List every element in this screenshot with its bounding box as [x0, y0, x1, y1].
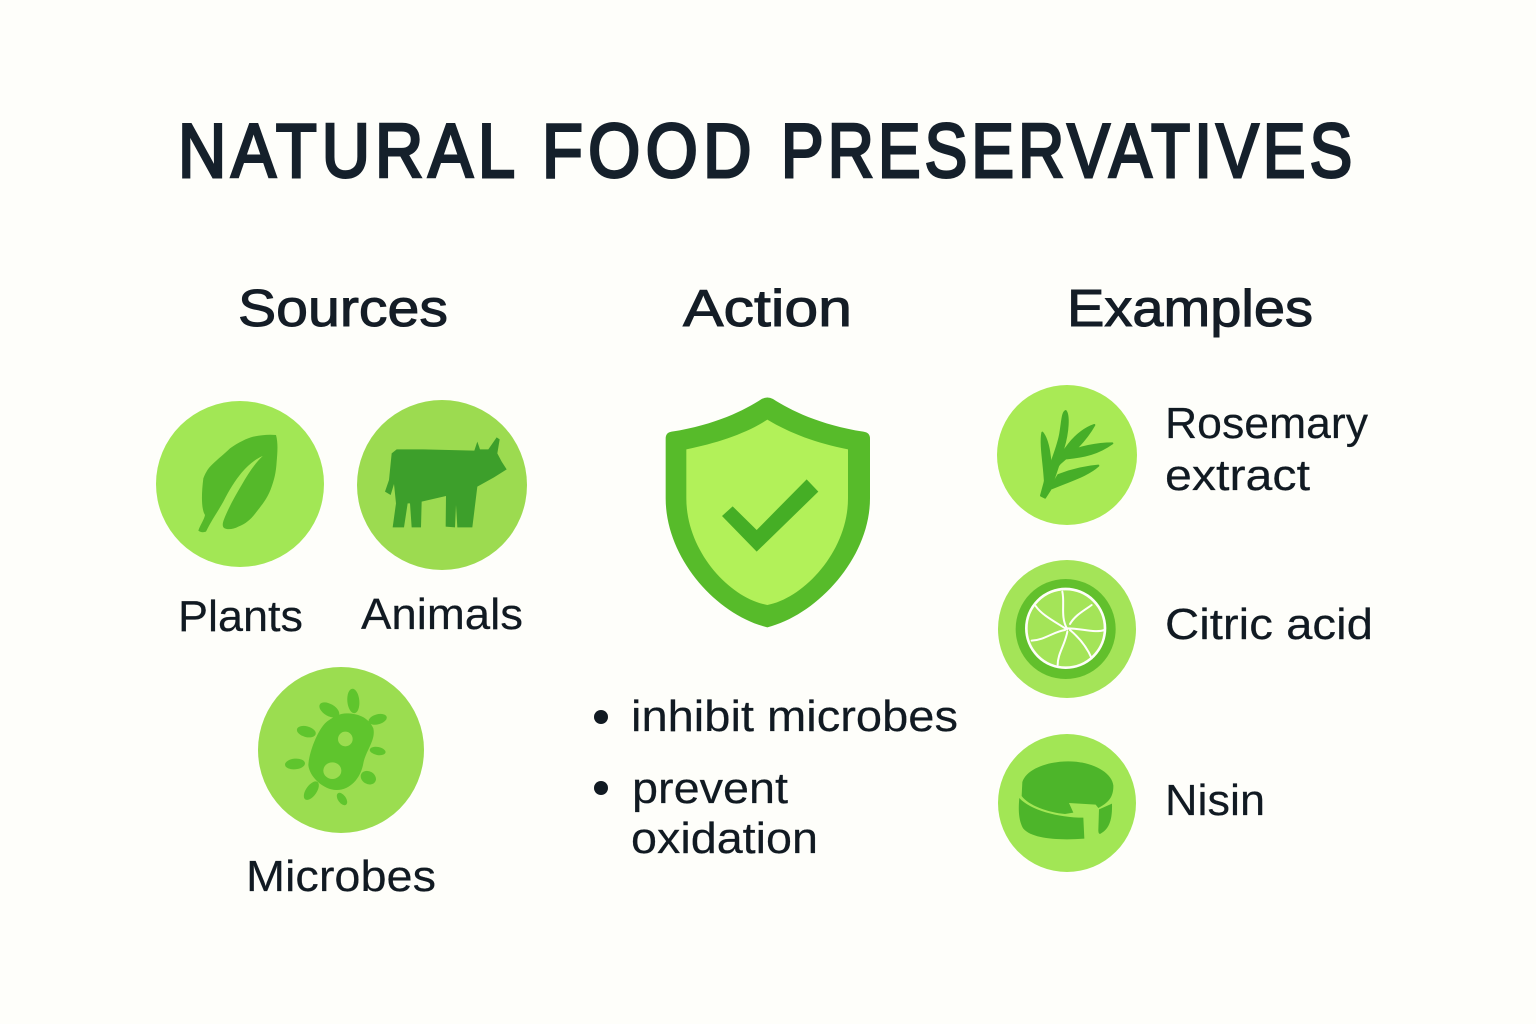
panel: sources	[156, 280, 527, 901]
icon: plants leaf	[156, 401, 324, 567]
icon: rosemary	[997, 385, 1137, 525]
heading: action: Action	[683, 280, 852, 338]
bullet: prevent oxidation: prevent	[632, 764, 788, 813]
bullet: inhibit microbes: inhibit microbes	[631, 692, 958, 741]
title	[178, 108, 1352, 194]
panel: examples	[997, 280, 1373, 872]
label: rosemary extract: extract	[1165, 451, 1310, 500]
icon: citrus slice	[998, 560, 1136, 698]
icon: shield with check	[666, 397, 870, 627]
label: nisin: Nisin	[1165, 776, 1265, 825]
icon: animals cow	[357, 400, 527, 570]
title: PRESERVATIVES	[781, 108, 1352, 193]
title: NATURAL	[178, 109, 515, 194]
icon: microbes	[258, 667, 424, 833]
heading: examples: Examples	[1067, 280, 1313, 338]
label: microbes: Microbes	[246, 852, 436, 901]
icon: nisin	[998, 734, 1136, 872]
bullet: prevent oxidation	[594, 764, 818, 863]
label: citric acid: Citric acid	[1165, 600, 1373, 649]
label: rosemary extract	[1165, 399, 1368, 500]
bullet list	[594, 692, 958, 863]
bullet: prevent oxidation: oxidation	[631, 814, 818, 863]
title: FOOD	[542, 109, 751, 194]
label: plants: Plants	[178, 592, 303, 641]
heading: sources: Sources	[238, 280, 448, 338]
panel: action	[594, 280, 958, 863]
label: rosemary extract: Rosemary	[1165, 399, 1368, 448]
label: animals: Animals	[361, 590, 523, 639]
